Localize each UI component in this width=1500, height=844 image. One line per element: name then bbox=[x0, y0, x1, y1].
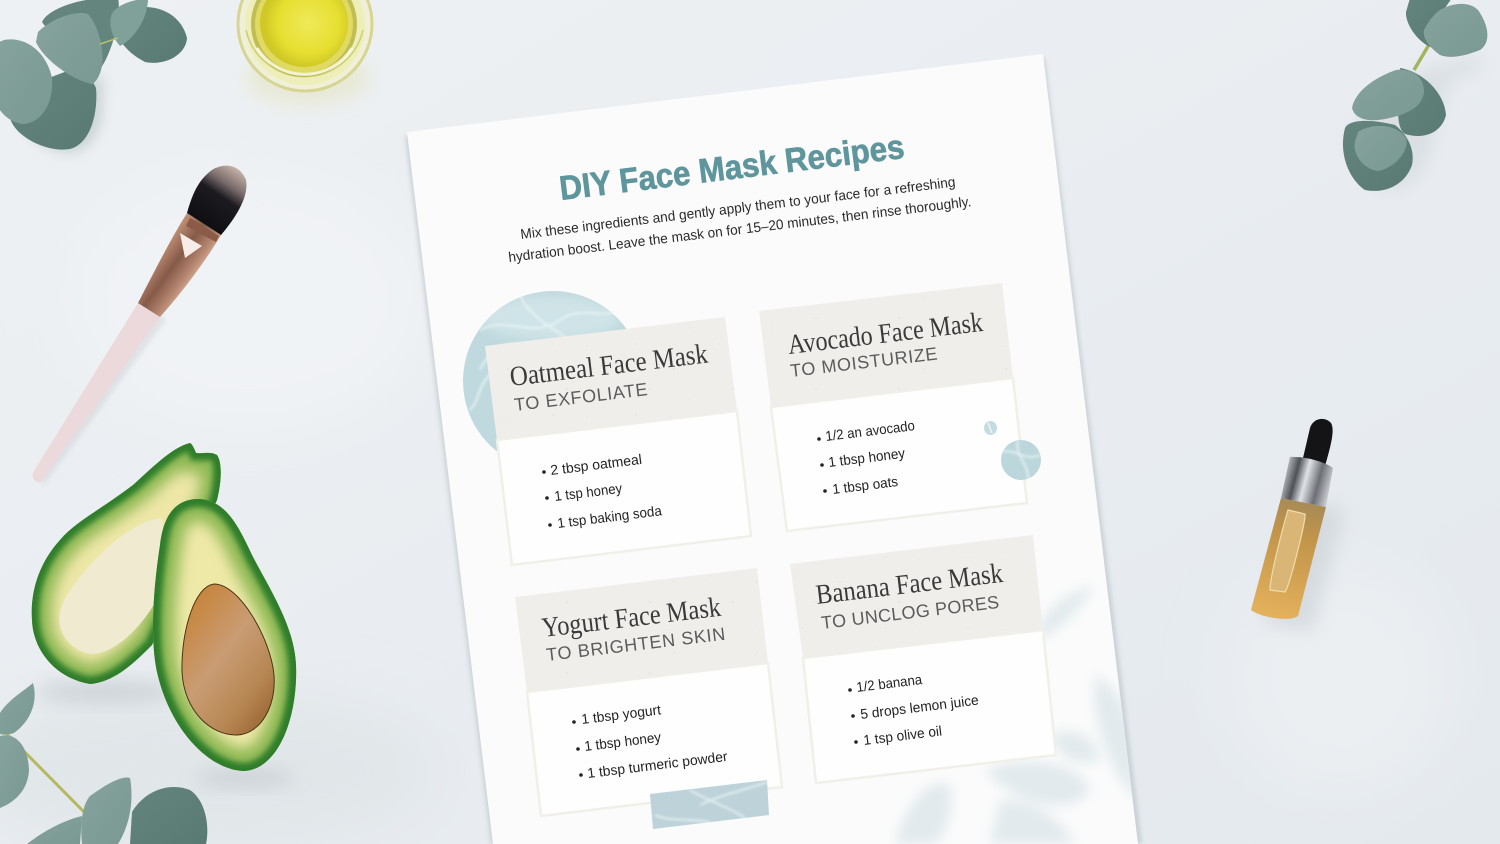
ingredient list: Banana bbox=[848, 671, 980, 748]
avocado halves bbox=[32, 443, 296, 788]
ingredient list: Banana: 5 drops lemon juice bbox=[859, 692, 980, 722]
avocado left cavity bbox=[59, 518, 166, 654]
ingredient list: Avocado bbox=[817, 417, 916, 497]
intro paragraph: hydration boost. Leave the mask on for 15–20 minutes, then rinse thoroughly. bbox=[507, 193, 972, 265]
ingredient list: Oatmeal bbox=[542, 451, 663, 531]
ingredient list: Avocado: 1/2 an avocado bbox=[824, 417, 916, 444]
brush bristles bbox=[187, 166, 246, 235]
leaf shadow on paper bbox=[895, 585, 1136, 844]
card title: Avocado: Avocado Face Mask bbox=[786, 307, 984, 361]
paper sheet bbox=[405, 54, 1142, 844]
eucalyptus sprig: top left bbox=[0, 0, 187, 153]
card: Avocado Face Mask bbox=[759, 283, 1041, 531]
card title: Banana: Banana Face Mask bbox=[814, 558, 1005, 611]
card header: Avocado bbox=[759, 283, 1013, 407]
avocado right half bbox=[153, 499, 296, 771]
card header: Oatmeal bbox=[485, 317, 737, 440]
ingredient list: Oatmeal: 1 tsp honey bbox=[553, 480, 623, 504]
ingredient list: Yogurt bbox=[572, 701, 729, 781]
ingredient list: Avocado: 1 tbsp oats bbox=[831, 473, 899, 497]
bottle cap bbox=[1281, 457, 1333, 507]
brush handle bbox=[33, 303, 160, 482]
card header: Banana bbox=[790, 535, 1043, 658]
eucalyptus sprig: top right bbox=[1343, 0, 1487, 191]
card subtitle: Oatmeal: TO EXFOLIATE bbox=[513, 379, 649, 415]
bottle body bbox=[1251, 498, 1326, 619]
card subtitle: Avocado: TO MOISTURIZE bbox=[789, 344, 938, 381]
makeup brush bbox=[33, 166, 246, 486]
ingredient list: Oatmeal: 1 tsp baking soda bbox=[556, 502, 663, 531]
ingredient list: Banana: 1 tsp olive oil bbox=[862, 722, 943, 748]
ingredient list: Oatmeal: 2 tbsp oatmeal bbox=[549, 451, 643, 478]
eucalyptus sprig: bottom left bbox=[0, 683, 207, 844]
avocado pit bbox=[182, 584, 274, 735]
card title: Yogurt: Yogurt Face Mask bbox=[540, 592, 723, 644]
card: Oatmeal Face Mask bbox=[485, 317, 751, 565]
brush ferrule bbox=[138, 213, 221, 317]
water rectangle decoration bbox=[650, 780, 769, 829]
card subtitle: Banana: TO UNCLOG PORES bbox=[820, 592, 1000, 633]
card: Banana Face Mask bbox=[790, 535, 1056, 783]
water circle decoration bbox=[463, 291, 626, 452]
ingredient list: Banana: 1/2 banana bbox=[855, 671, 923, 695]
small water circles bbox=[984, 421, 1041, 480]
ingredient list: Yogurt: 1 tbsp turmeric powder bbox=[586, 748, 729, 781]
oil bowl bbox=[237, 0, 373, 104]
intro paragraph: Mix these ingredients and gently apply them to your face for a refreshing bbox=[519, 173, 956, 242]
card subtitle: Yogurt: TO BRIGHTEN SKIN bbox=[545, 624, 726, 665]
card header: Yogurt bbox=[515, 568, 768, 692]
ingredient list: Avocado: 1 tbsp honey bbox=[827, 445, 906, 470]
dropper bulb bbox=[1303, 419, 1333, 466]
ingredient list: Yogurt: 1 tbsp yogurt bbox=[580, 701, 662, 727]
card title: Oatmeal: Oatmeal Face Mask bbox=[508, 339, 709, 393]
avocado left half bbox=[32, 443, 221, 684]
title: DIY Face Mask Recipes bbox=[557, 128, 906, 208]
card: Yogurt Face Mask bbox=[515, 568, 782, 816]
dropper bottle bbox=[1251, 419, 1345, 632]
ingredient list: Yogurt: 1 tbsp honey bbox=[583, 729, 662, 754]
